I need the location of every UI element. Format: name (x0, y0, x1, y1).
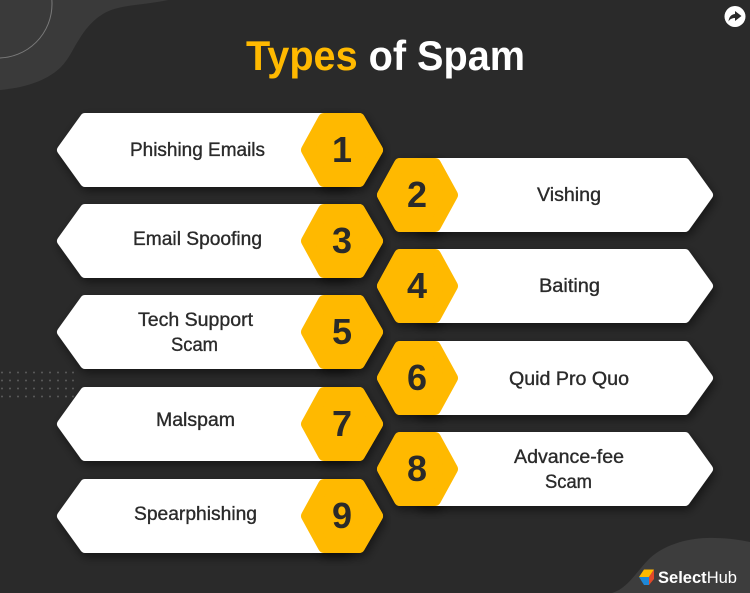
item 2: Vishing: Vishing (537, 185, 601, 206)
item 2: Vishing (383, 163, 708, 227)
item 7: Malspam: Malspam (156, 410, 235, 431)
item 1: Phishing Emails: 1 (332, 129, 352, 170)
item 4: Baiting: Baiting (539, 276, 600, 297)
item 3: Email Spoofing (62, 209, 377, 273)
SelectHub logo: SelectHub (658, 568, 737, 587)
item 5: Tech Support Scam: Tech Support (138, 310, 254, 331)
item 6: Quid Pro Quo (383, 346, 708, 410)
item 7: Malspam (62, 392, 377, 456)
item 6: Quid Pro Quo: Quid Pro Quo (509, 369, 629, 390)
item 5: Tech Support Scam (62, 300, 377, 364)
item 4: Baiting: 4 (407, 265, 427, 306)
item 8: Advance-fee Scam: Advance-fee (514, 447, 624, 468)
item 3: Email Spoofing: Email Spoofing (133, 229, 262, 250)
title: Types of Spam (246, 32, 525, 79)
background blob: top left (0, 0, 168, 90)
item 5: Tech Support Scam: Scam (171, 335, 218, 356)
item 5: Tech Support Scam: 5 (332, 311, 352, 352)
item 6: Quid Pro Quo: 6 (407, 357, 427, 398)
item 9: Spearphishing: 9 (332, 495, 352, 536)
item 1: Phishing Emails: Phishing Emails (130, 140, 265, 161)
item 3: Email Spoofing: 3 (332, 220, 352, 261)
background blob: bottom right (612, 538, 750, 593)
icon: share (724, 6, 746, 27)
item 9: Spearphishing (62, 484, 377, 548)
dot grid decoration (1, 372, 74, 398)
item 1: Phishing Emails (62, 118, 377, 182)
item 8: Advance-fee Scam: Scam (545, 472, 592, 493)
item 9: Spearphishing: Spearphishing (134, 504, 257, 525)
item 8: Advance-fee Scam (383, 437, 708, 501)
item 8: Advance-fee Scam: 8 (407, 448, 427, 489)
item 2: Vishing: 2 (407, 174, 427, 215)
item 7: Malspam: 7 (332, 403, 352, 444)
item 4: Baiting (383, 254, 708, 318)
